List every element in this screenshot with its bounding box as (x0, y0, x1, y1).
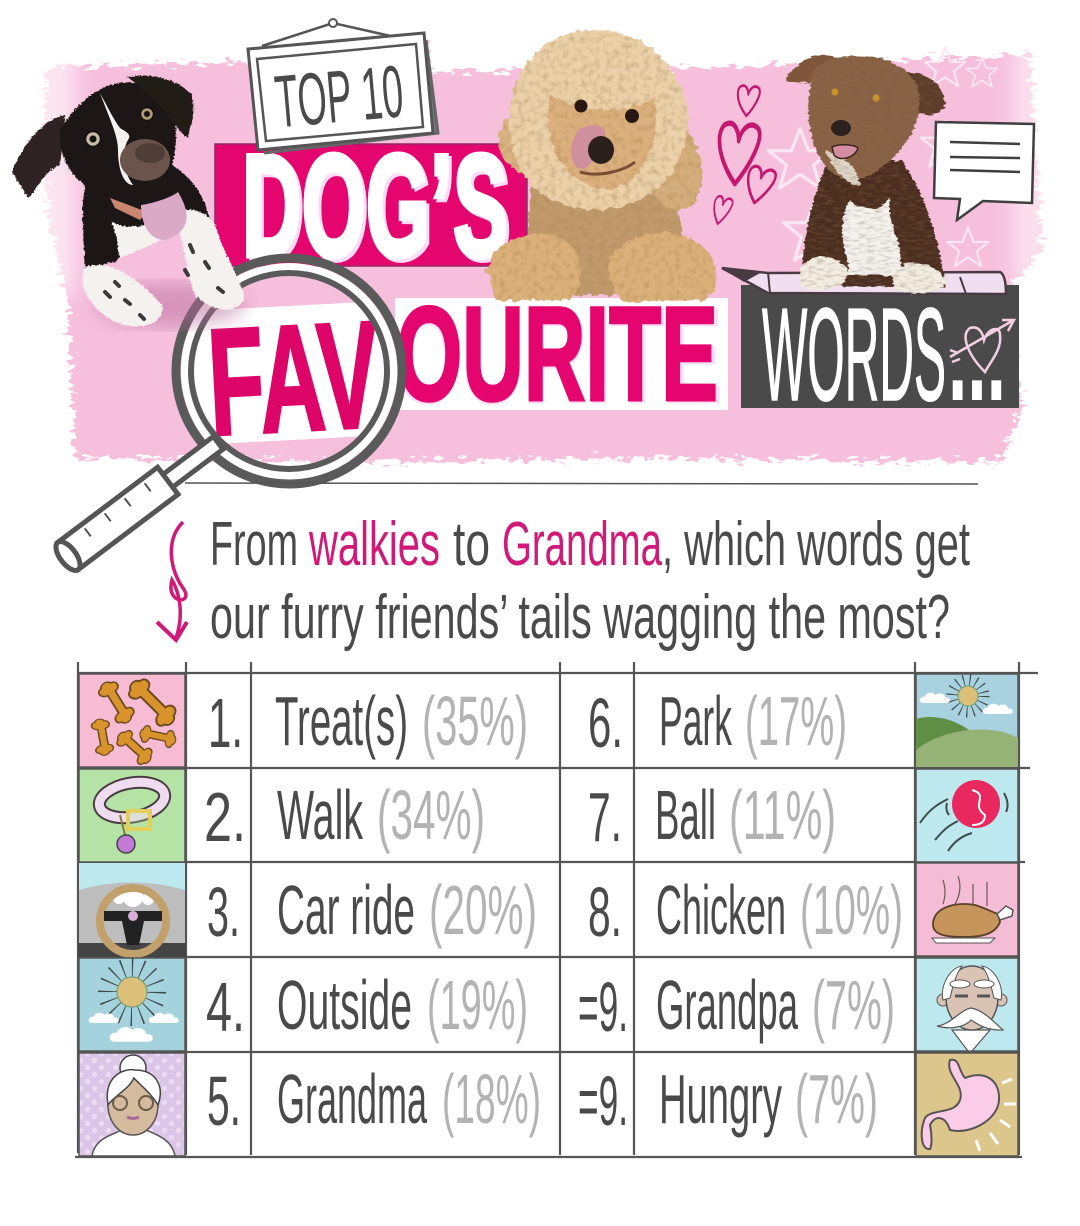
ranked words 1 to 5: (20%) (429, 871, 537, 949)
panel: TOP 10 hanging sign: TOP 10 (272, 49, 407, 143)
icon: black and white dog (12, 76, 245, 327)
ranking table grid (75, 662, 1038, 1157)
icon: brown terrier dog (785, 55, 945, 293)
rank numbers left: 3. (207, 873, 240, 951)
header pink brush background (25, 42, 1057, 462)
subheading: Grandma (502, 510, 662, 579)
panel: DOG'S pink box (215, 144, 527, 266)
ranked words 1 to 5 (275, 682, 541, 1138)
title: OURITE (394, 280, 722, 431)
icon: ball (916, 769, 1018, 862)
rank numbers left: 1. (208, 684, 243, 762)
icon: grandma (79, 1053, 185, 1156)
icon: treats bones (79, 674, 185, 768)
subheading (210, 510, 970, 652)
icon: magnifying glass (51, 258, 402, 574)
ranked words 1 to 5: (35%) (422, 682, 528, 760)
ranked words 6 to 10: Park (659, 682, 733, 760)
ranked words 6 to 10: (7%) (812, 966, 895, 1044)
panel: OURITE white box (395, 298, 728, 410)
ranked words 6 to 10: (17%) (745, 682, 847, 760)
rank numbers right: 7. (588, 778, 622, 856)
title: DOG'S (242, 124, 511, 290)
ranked words 6 to 10 (655, 682, 903, 1138)
rank numbers left (204, 684, 246, 1140)
title: DOG'S: DOG’S (242, 124, 508, 287)
ranked words 6 to 10: (7%) (795, 1060, 878, 1138)
icon: pink hearts (710, 85, 777, 226)
icon: pencil (722, 268, 1006, 294)
icon: park hills (916, 674, 1018, 767)
title: FAV lens patch: FAV (204, 289, 383, 468)
ranked words 1 to 5: Car ride (277, 871, 415, 949)
icon: roast chicken (916, 863, 1018, 956)
ranked words 6 to 10: Chicken (656, 871, 786, 949)
ranked words 6 to 10: (11%) (729, 776, 836, 854)
title: DOG'S: DOG’S (245, 127, 511, 290)
subheading: walkies (308, 510, 440, 579)
icon: collar (79, 769, 185, 862)
rank numbers right: 8. (588, 873, 622, 951)
icon: speech bubble (934, 122, 1034, 220)
ranked words 1 to 5: Treat(s) (275, 682, 408, 760)
icon: heart with arrow (950, 320, 1014, 372)
title: OURITE: OURITE (394, 282, 722, 431)
icon: stomach (916, 1053, 1018, 1156)
icon: car steering wheel (78, 863, 186, 957)
ranked words 1 to 5: Walk (277, 776, 364, 854)
ranked words 1 to 5: Grandma (277, 1060, 427, 1138)
ranked words 6 to 10: (10%) (800, 871, 903, 949)
rank numbers left: 5. (207, 1062, 241, 1140)
icon: poodle (487, 30, 716, 302)
rank numbers right: =9. (578, 1062, 628, 1140)
ranked words 1 to 5: Outside (277, 966, 412, 1044)
rank numbers left: 4. (206, 968, 245, 1046)
subheading: From (210, 510, 298, 579)
rank numbers right (578, 684, 628, 1140)
ranked words 6 to 10: Hungry (659, 1060, 782, 1138)
rank numbers left: 2. (204, 778, 246, 856)
ranked words 1 to 5: (34%) (377, 776, 485, 854)
panel: TOP 10 hanging sign (248, 19, 438, 153)
ranked words 1 to 5: (18%) (442, 1060, 541, 1138)
icon: curly arrow (157, 522, 187, 640)
panel: WORDS dark box (741, 285, 1019, 408)
rank numbers right: =9. (578, 968, 628, 1046)
rank numbers right: 6. (588, 684, 623, 762)
title: FAV lens patch (194, 302, 384, 444)
icon: grandpa (916, 958, 1018, 1051)
title: OURITE: OURITE (396, 280, 718, 429)
ranked words 6 to 10: Ball (655, 776, 716, 854)
title: WORDS...: ... (948, 281, 1006, 428)
ranked words 6 to 10: Grandpa (656, 966, 798, 1044)
divider line (185, 483, 978, 484)
ranked words 1 to 5: (19%) (427, 966, 528, 1044)
subheading: to (453, 510, 490, 579)
icon: white stars (769, 48, 998, 266)
icon: outside sun and clouds (79, 958, 185, 1051)
